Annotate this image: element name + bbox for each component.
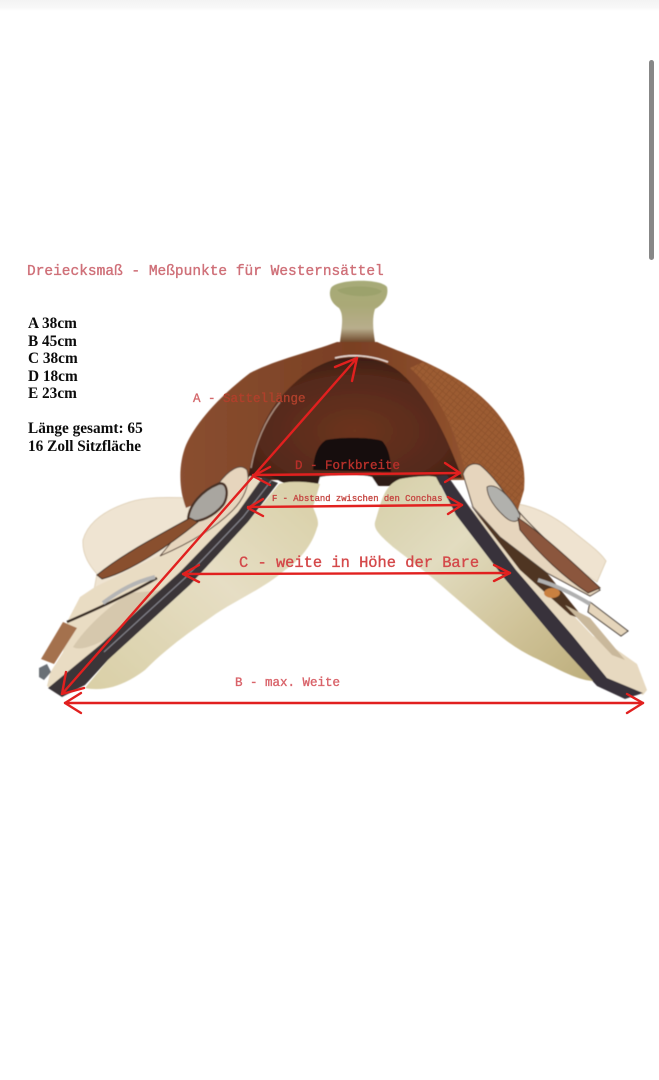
arrow E <box>248 497 462 516</box>
left binding highlight <box>104 481 271 652</box>
measurement arrows <box>62 358 643 713</box>
top status bar <box>0 0 659 11</box>
diagram labels <box>27 264 479 690</box>
measurement list: C 38cm <box>28 350 78 367</box>
label B: B - max. Weite <box>235 676 340 690</box>
horn <box>330 281 387 342</box>
right dark binding <box>436 475 643 699</box>
left flap <box>160 467 248 556</box>
left skirt recess <box>73 590 165 648</box>
left rear skirt <box>83 497 190 590</box>
left fender strap <box>97 518 198 579</box>
left stirrup ring <box>103 577 155 603</box>
arch left highlight <box>251 402 280 468</box>
left concho <box>188 483 227 521</box>
right under shadow <box>470 505 585 620</box>
scrollbar <box>649 60 654 260</box>
right fleece <box>375 476 593 681</box>
left stirrup strap <box>67 578 157 622</box>
gullet white opening <box>270 475 440 640</box>
left strings tie <box>41 622 77 664</box>
right lower skirt <box>466 503 647 695</box>
arrow C <box>183 565 510 582</box>
right stirrup ring <box>538 580 590 604</box>
left dark binding <box>48 477 278 697</box>
measurement list <box>28 315 78 402</box>
total length note: 16 Zoll Sitzfläche <box>28 438 141 455</box>
label D: D - Forkbreite <box>295 459 400 473</box>
right lower flap <box>588 602 628 636</box>
tunnel opening <box>313 438 391 472</box>
arrow A <box>62 358 357 694</box>
saddle photograph <box>39 281 647 699</box>
label C: C - weite in Höhe der Bare <box>239 554 479 572</box>
label A: A - Sattellänge <box>193 392 306 406</box>
left fleece <box>85 482 320 689</box>
total length note: Länge gesamt: 65 <box>28 420 143 437</box>
shadow under fork <box>270 476 445 486</box>
measurement list: A 38cm <box>28 315 77 332</box>
diagram title: Dreiecksmaß - Meßpunkte für Westernsättel <box>27 264 384 280</box>
arch highlight <box>335 356 388 362</box>
right flap <box>463 464 600 596</box>
arrow D <box>253 463 460 485</box>
right concho <box>487 486 520 521</box>
measurement list: B 45cm <box>28 333 77 350</box>
gullet interior <box>248 358 462 480</box>
left buckle <box>39 664 51 680</box>
basket weave right <box>410 362 524 510</box>
measurement list: D 18cm <box>28 368 78 385</box>
right rear skirt <box>518 504 606 582</box>
saddle fork leather <box>180 342 524 510</box>
arrow B <box>65 693 643 713</box>
measurement list: E 23cm <box>28 385 77 402</box>
left lower skirt <box>47 476 268 697</box>
total length note <box>28 420 143 455</box>
right fender strap <box>518 518 600 593</box>
label F: F - Abstand zwischen den Conchas <box>272 494 442 504</box>
right skirt recess <box>565 605 625 660</box>
right stirrup keeper <box>544 588 560 598</box>
